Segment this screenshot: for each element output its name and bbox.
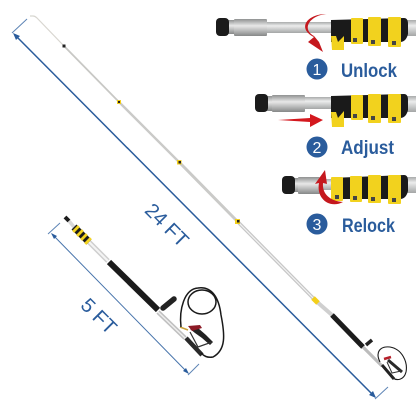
step 2: adjust pole image — [255, 94, 416, 127]
label: Adjust: Adjust — [341, 138, 395, 159]
step 3: relock pole image — [282, 175, 416, 204]
spray gun — [180, 325, 213, 355]
label: 5 FT: 5 FT — [76, 294, 121, 339]
step badge 1 — [306, 58, 328, 80]
side handle — [163, 299, 174, 308]
step 1: unlock pole image — [216, 17, 416, 50]
long pole extended to 24 ft — [30, 16, 406, 380]
arrow: rotate to relock — [315, 170, 343, 204]
label: Unlock: Unlock — [341, 61, 397, 82]
mini spray gun and hose — [378, 347, 406, 380]
step badge 2 — [306, 136, 328, 158]
label: 24 FT: 24 FT — [140, 199, 193, 252]
arrow: rotate to unlock — [305, 14, 328, 52]
label: Relock: Relock — [342, 216, 395, 237]
telescoping lock collar — [74, 227, 89, 242]
pole joints — [62, 44, 318, 303]
step badge 3 — [306, 214, 328, 234]
coiled hose — [181, 288, 224, 357]
short pole collapsed to 5 ft — [65, 217, 224, 357]
arrow: slide to adjust — [278, 114, 323, 127]
step badge 2: 2 — [313, 140, 322, 157]
step badge 1: 1 — [313, 62, 322, 79]
step badge 3: 3 — [313, 217, 322, 234]
dimension line: 5 ft — [48, 223, 199, 375]
